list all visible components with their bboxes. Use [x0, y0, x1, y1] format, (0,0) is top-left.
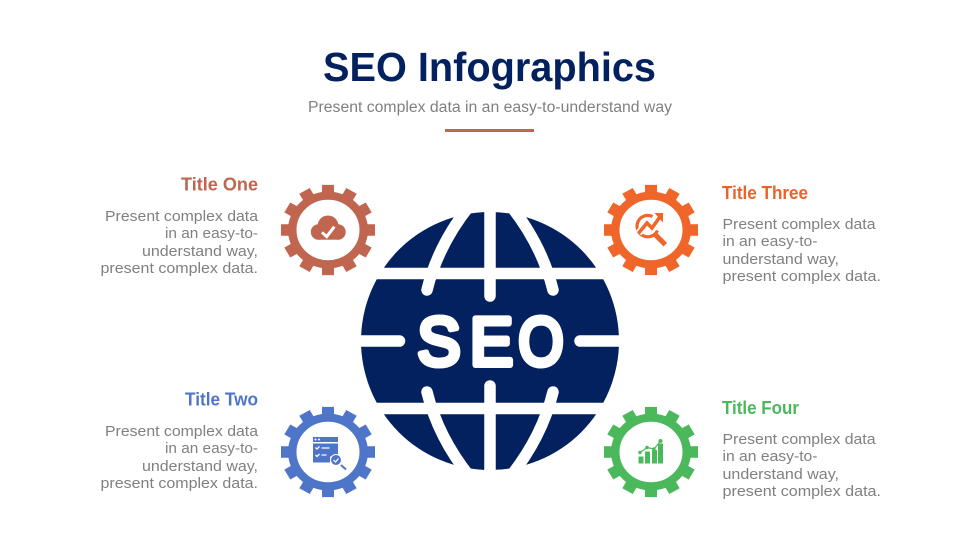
- body text: title one: [100, 208, 259, 277]
- body text: title two: Present complex data: [105, 423, 259, 440]
- body text: title two: present complex data.: [100, 475, 258, 492]
- panel: title one: [100, 174, 259, 277]
- body text: title one: present complex data.: [100, 260, 258, 277]
- body text: title one: Present complex data: [105, 208, 259, 225]
- body text: title three: [722, 216, 881, 285]
- body text: title four: understand way,: [722, 466, 839, 483]
- body text: title two: in an easy-to-: [165, 440, 258, 457]
- body text: title four: Present complex data: [722, 431, 876, 448]
- title: SEO Infographics: [323, 44, 656, 90]
- body text: title one: in an easy-to-: [165, 225, 258, 242]
- body text: title three: in an easy-to-: [722, 233, 818, 250]
- body text: title four: present complex data.: [722, 483, 881, 500]
- icon: gear with magnifier and rising arrow: [604, 185, 698, 275]
- title underline: [445, 129, 534, 132]
- body text: title two: understand way,: [142, 458, 258, 475]
- globe label: S: [418, 304, 460, 380]
- heading: title three: Title Three: [722, 183, 808, 203]
- body text: title three: understand way,: [722, 251, 839, 268]
- icon: gear with growth bar chart: [604, 407, 698, 497]
- heading: title four: Title Four: [722, 398, 799, 418]
- panel: title four: [722, 398, 881, 500]
- icon: gear with cloud check: [281, 185, 375, 275]
- body text: title four: [722, 431, 881, 500]
- panel: title two: [100, 390, 259, 492]
- icon: gear with checklist and magnifier: [281, 407, 375, 497]
- globe label: E: [470, 304, 513, 380]
- globe label: O: [518, 304, 564, 380]
- panel: title three: [722, 183, 881, 285]
- body text: title three: present complex data.: [722, 268, 881, 285]
- body text: title two: [100, 423, 259, 492]
- body text: title one: understand way,: [142, 243, 258, 260]
- globe label: [418, 304, 564, 380]
- subtitle: Present complex data in an easy-to-understand way: [308, 99, 672, 116]
- body text: title three: Present complex data: [722, 216, 876, 233]
- heading: title two: Title Two: [185, 390, 258, 410]
- body text: title four: in an easy-to-: [722, 448, 818, 465]
- central SEO globe icon: [350, 200, 630, 482]
- heading: title one: Title One: [181, 174, 258, 194]
